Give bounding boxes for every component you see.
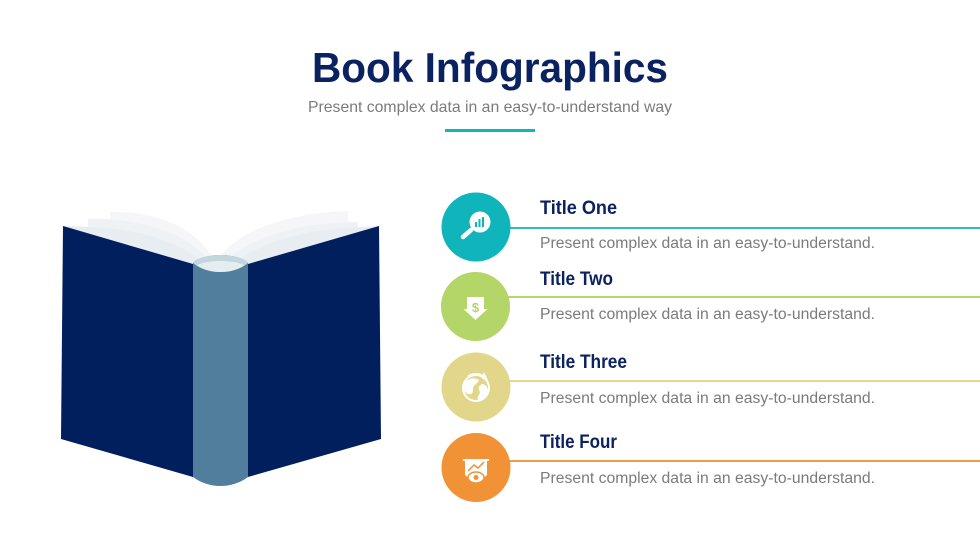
title: Book Infographics <box>312 44 668 91</box>
icon: chart shield with eye <box>463 459 489 484</box>
title underline <box>445 129 535 132</box>
icon: down arrow with dollar: $ <box>472 300 480 315</box>
description: Present complex data in an easy-to-understand. <box>540 306 875 323</box>
book spine <box>193 255 248 486</box>
item: title one <box>442 192 980 262</box>
item: title three <box>442 352 980 422</box>
left cover <box>61 226 193 477</box>
description: Present complex data in an easy-to-understand. <box>540 470 875 487</box>
circle <box>441 272 510 341</box>
icon: magnifier with chart <box>463 212 490 237</box>
connector line <box>505 380 980 382</box>
heading: Title Two <box>540 269 613 290</box>
item: title four <box>442 432 980 502</box>
heading: Title Three <box>540 352 627 373</box>
description: Present complex data in an easy-to-understand. <box>540 235 875 252</box>
right cover <box>248 226 381 477</box>
heading: Title One <box>540 198 617 219</box>
connector line <box>505 460 980 462</box>
icon: globe with arrow <box>463 372 489 401</box>
item: title two <box>441 269 980 341</box>
spine top opening <box>193 255 248 272</box>
book illustration <box>61 211 381 486</box>
connector line <box>505 227 980 229</box>
circle <box>442 433 510 502</box>
spine inner page <box>197 261 244 272</box>
subtitle: Present complex data in an easy-to-understand way <box>308 99 672 116</box>
description: Present complex data in an easy-to-understand. <box>540 390 875 407</box>
circle <box>442 352 510 422</box>
circle <box>442 192 510 262</box>
book pages <box>63 211 379 270</box>
icon: down arrow with dollar <box>464 297 488 320</box>
connector line <box>505 296 980 298</box>
heading: Title Four <box>540 432 618 453</box>
